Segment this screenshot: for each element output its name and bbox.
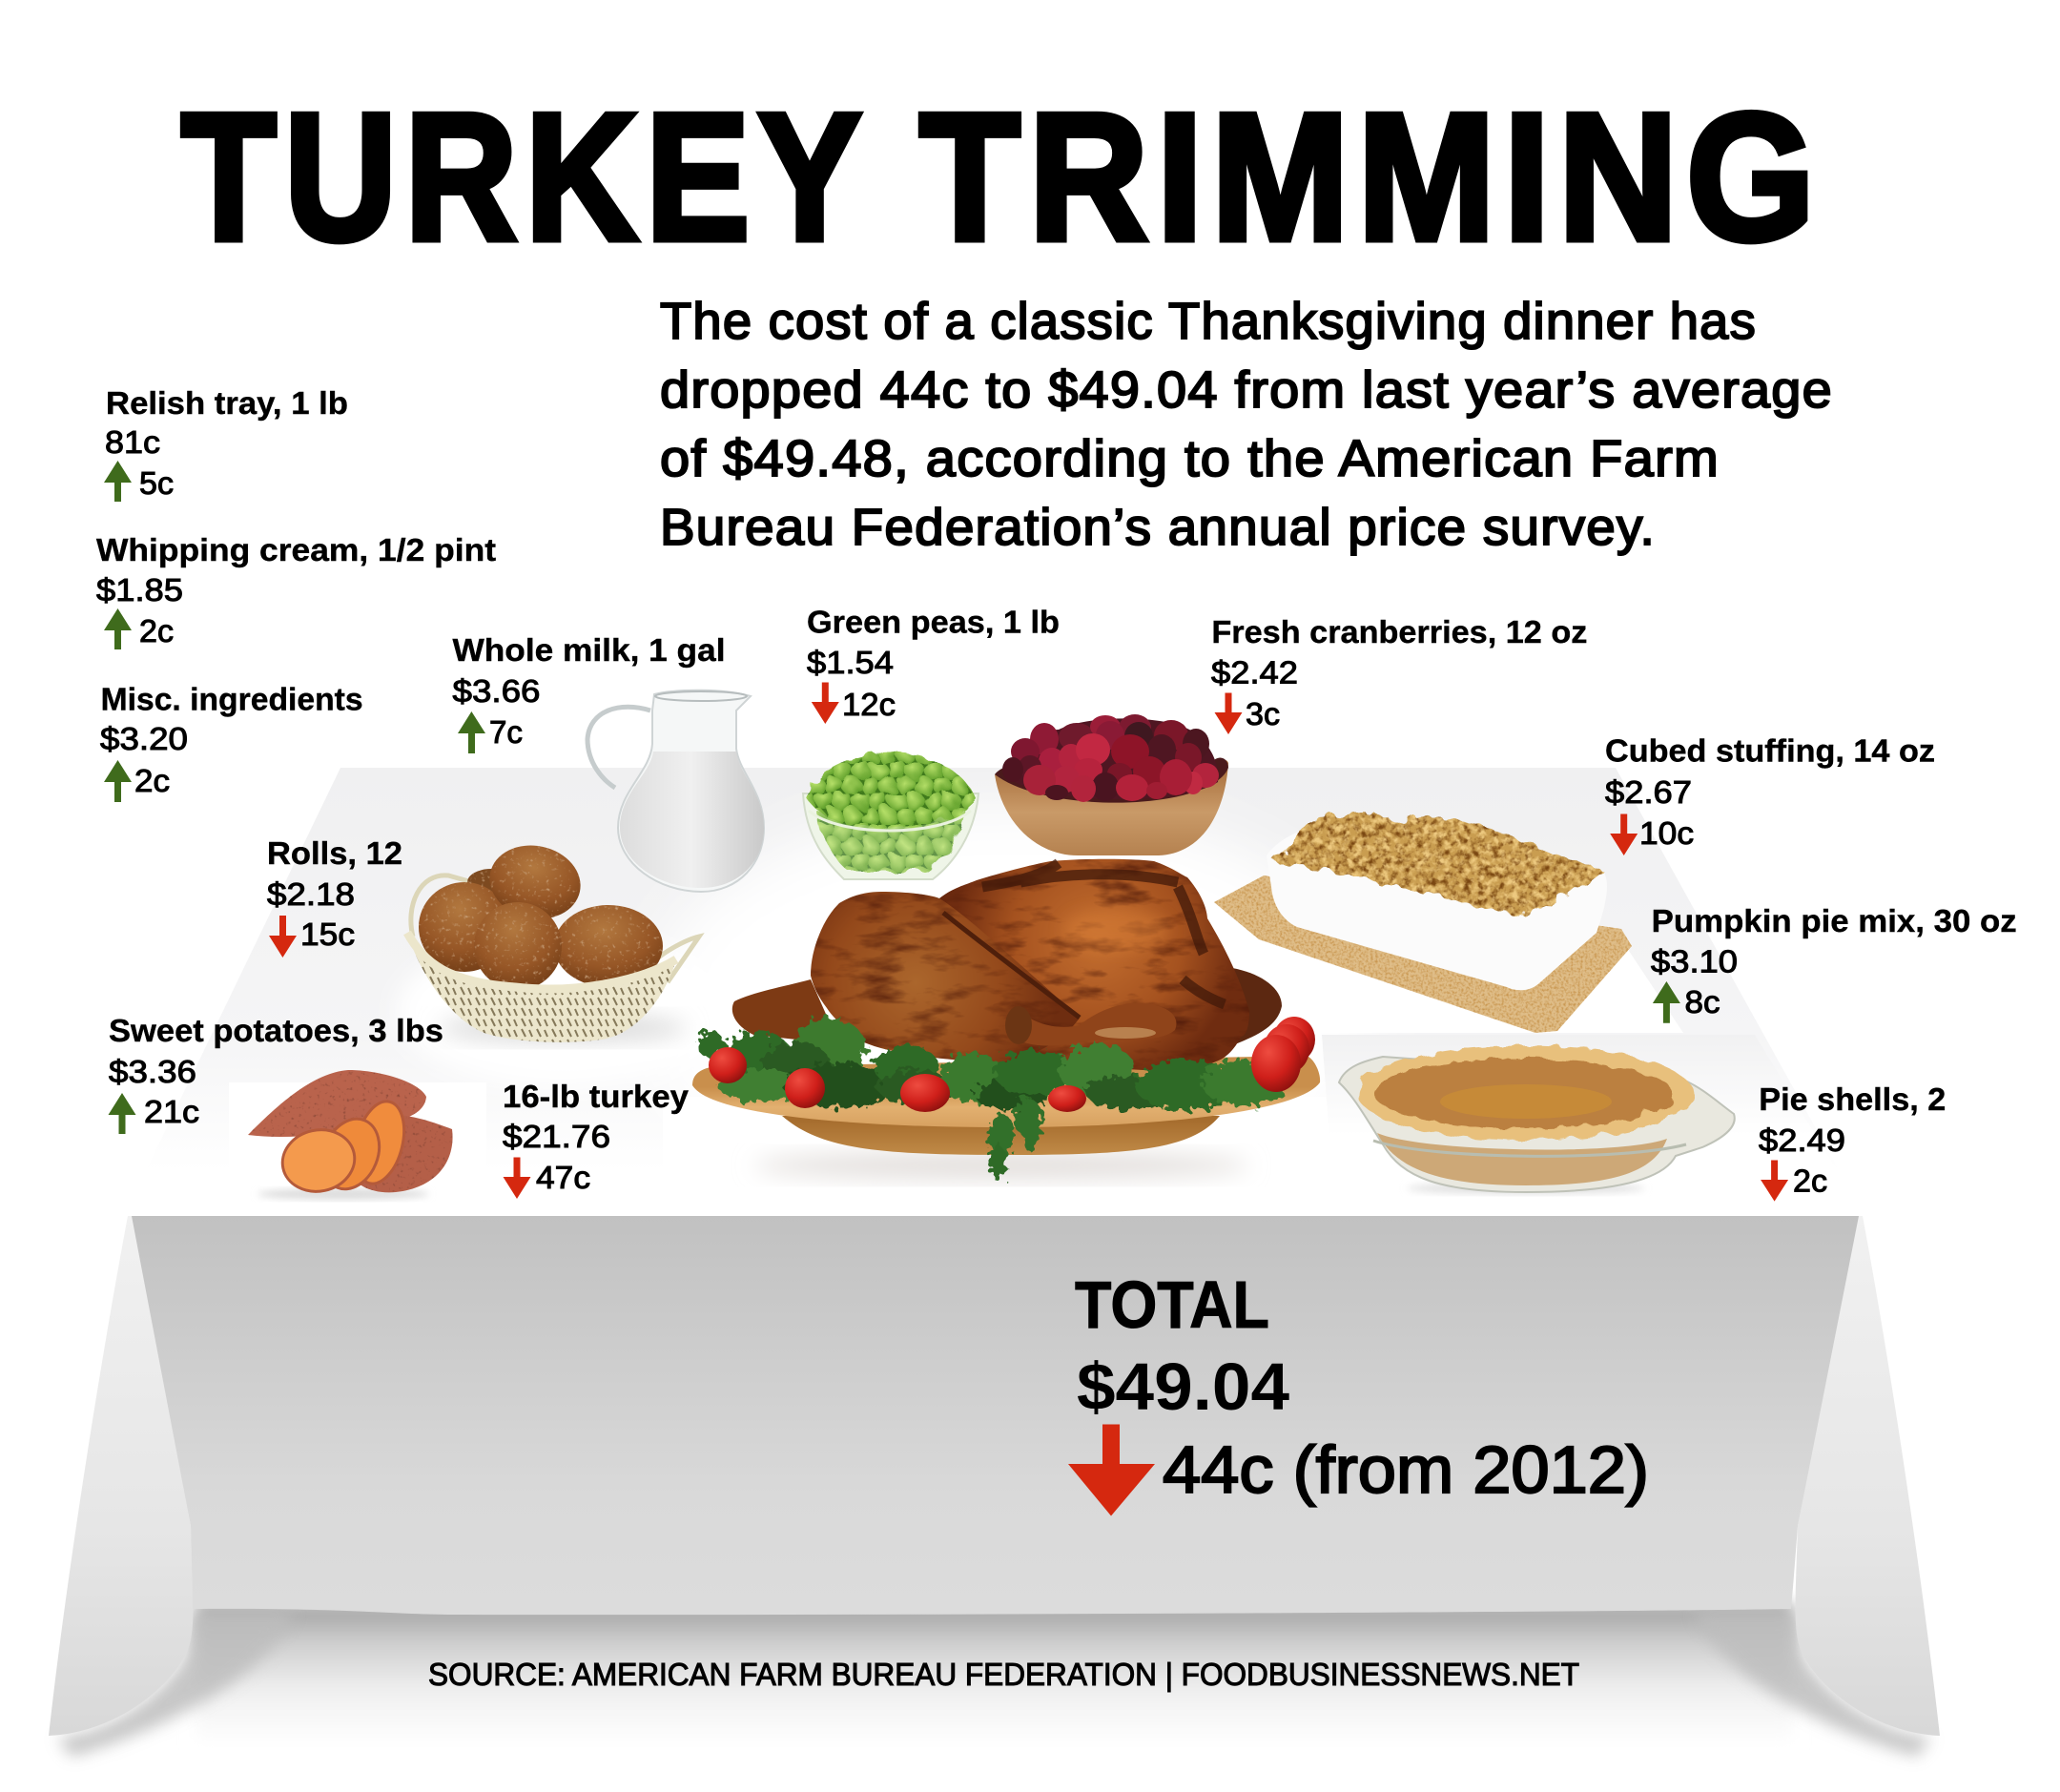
label: Sweet potatoes: Sweet potatoes, 3 lbs: [109, 1013, 443, 1048]
burlap mat: [1214, 875, 1632, 1033]
label: Green peas: 12c: [842, 687, 896, 722]
label: Green peas: Green peas, 1 lb: [807, 605, 1060, 639]
label: Cubed stuffing: $2.67: [1605, 774, 1692, 810]
label: Pumpkin pie mix: 8c: [1684, 984, 1720, 1020]
title: [181, 76, 1823, 278]
turkey thigh: [811, 892, 1080, 1063]
icon: milk jug: [587, 690, 764, 892]
label: Fresh cranberries: Fresh cranberries, 12 oz: [1211, 614, 1587, 649]
label: Sweet potatoes: 21c: [144, 1094, 199, 1129]
label: Green peas: [807, 605, 1060, 724]
icon: green peas bowl: [803, 753, 978, 879]
label: Whipping cream: $1.85: [96, 572, 183, 608]
berry mound: [1006, 718, 1218, 799]
stuffing: [1274, 813, 1602, 916]
label: 16-lb turkey: [503, 1079, 690, 1199]
intro paragraph: dropped 44c to $49.04 from last year’s average: [660, 361, 1833, 419]
label: 16-lb turkey: $21.76: [503, 1119, 610, 1154]
label: Fresh cranberries: 3c: [1246, 696, 1280, 731]
label: Sweet potatoes: [109, 1013, 443, 1134]
total change: 44c (from 2012): [1163, 1432, 1649, 1507]
turkey left leg: [732, 979, 839, 1044]
label: Relish tray: 81c: [105, 424, 160, 460]
intro paragraph: Bureau Federation’s annual price survey.: [660, 499, 1656, 556]
intro paragraph: The cost of a classic Thanksgiving dinner has: [660, 293, 1757, 350]
label: Misc. ingredients: 2c: [134, 763, 170, 798]
label: Misc. ingredients: [100, 681, 363, 802]
table top surface: [124, 768, 1864, 1216]
label: Rolls: $2.18: [267, 876, 355, 912]
right cloth fold: [1796, 1216, 1940, 1736]
total price: $49.04: [1077, 1349, 1289, 1424]
tomatoes: [709, 1017, 1315, 1112]
white photo backgrounds on table: [229, 806, 1864, 1216]
label: Pie shells: [1759, 1081, 1946, 1202]
table shadow on floor: [57, 1602, 1931, 1757]
icon: roast turkey on platter: [692, 859, 1320, 1181]
intro paragraph: of $49.48, according to the American Farm: [660, 430, 1720, 487]
drumstick: [1011, 1003, 1176, 1045]
title: TRIMMING: [919, 76, 1823, 278]
table with white cloth: [49, 768, 1940, 1757]
title: TURKEY: [181, 76, 870, 278]
icon: pumpkin pie: [1339, 1045, 1735, 1194]
basket: [407, 933, 676, 1042]
label: Rolls: Rolls, 12: [267, 835, 402, 871]
label: Relish tray: [104, 385, 348, 502]
label: Whole milk: $3.66: [452, 673, 540, 709]
label: Relish tray: Relish tray, 1 lb: [106, 385, 348, 421]
label: 16-lb turkey: 47c: [536, 1160, 590, 1195]
label: Fresh cranberries: [1211, 614, 1587, 734]
label: Whipping cream: Whipping cream, 1/2 pint: [96, 532, 496, 567]
label: Whipping cream: 2c: [139, 613, 174, 649]
label: Sweet potatoes: $3.36: [109, 1054, 196, 1089]
parsley garnish: [697, 1019, 1288, 1181]
total heading: TOTAL: [1075, 1267, 1269, 1342]
label: Cubed stuffing: 10c: [1639, 815, 1694, 851]
total callout: [1068, 1267, 1649, 1516]
label: Pumpkin pie mix: [1651, 903, 2017, 1023]
icon: rolls in basket: [407, 837, 699, 1042]
label: Relish tray: 5c: [139, 465, 174, 501]
turkey wing: [1232, 968, 1282, 1044]
skin creases: [943, 913, 1080, 1018]
label: 16-lb turkey: 16-lb turkey: [503, 1079, 690, 1114]
label: Pie shells: Pie shells, 2: [1759, 1081, 1946, 1117]
label: Cubed stuffing: [1605, 732, 1935, 855]
platter: [692, 1056, 1320, 1155]
glass dish: [1339, 1057, 1735, 1192]
intro paragraph: [660, 293, 1833, 556]
label: Whole milk: Whole milk, 1 gal: [452, 632, 725, 668]
label: Misc. ingredients: $3.20: [100, 721, 188, 756]
left cloth fold: [49, 1216, 193, 1736]
label: Cubed stuffing: Cubed stuffing, 14 oz: [1605, 732, 1935, 769]
label: Whipping cream: [96, 532, 496, 649]
table front panel: [132, 1216, 1859, 1615]
sweet potato slices: [277, 1097, 412, 1198]
label: Pumpkin pie mix: $3.10: [1651, 944, 1738, 978]
label: Rolls: 15c: [300, 917, 355, 952]
turkey breast: [938, 859, 1249, 1072]
arrow: total down: [1068, 1425, 1155, 1516]
label: Pie shells: $2.49: [1759, 1123, 1845, 1158]
label: Misc. ingredients: Misc. ingredients: [101, 681, 363, 717]
label: Green peas: $1.54: [807, 645, 894, 680]
label: Whole milk: 7c: [489, 714, 523, 750]
icon: cranberries in wooden bowl: [995, 714, 1228, 855]
icon: stuffing dish on burlap mat: [1214, 813, 1632, 1033]
source line: SOURCE: AMERICAN FARM BUREAU FEDERATION | FOODBUSINESSNEWS.NET: [428, 1657, 1579, 1692]
label: Whole milk: [452, 632, 725, 753]
icon: sweet potatoes: [248, 1070, 453, 1200]
label: Pie shells: 2c: [1793, 1164, 1827, 1198]
label: Pumpkin pie mix: Pumpkin pie mix, 30 oz: [1652, 903, 2017, 938]
label: Fresh cranberries: $2.42: [1211, 654, 1298, 690]
turkey body: [732, 859, 1282, 1072]
white casserole dish: [1267, 826, 1607, 990]
rolls: [419, 837, 663, 990]
pie crust and filling: [1357, 1045, 1693, 1141]
label: Rolls: [267, 835, 402, 958]
